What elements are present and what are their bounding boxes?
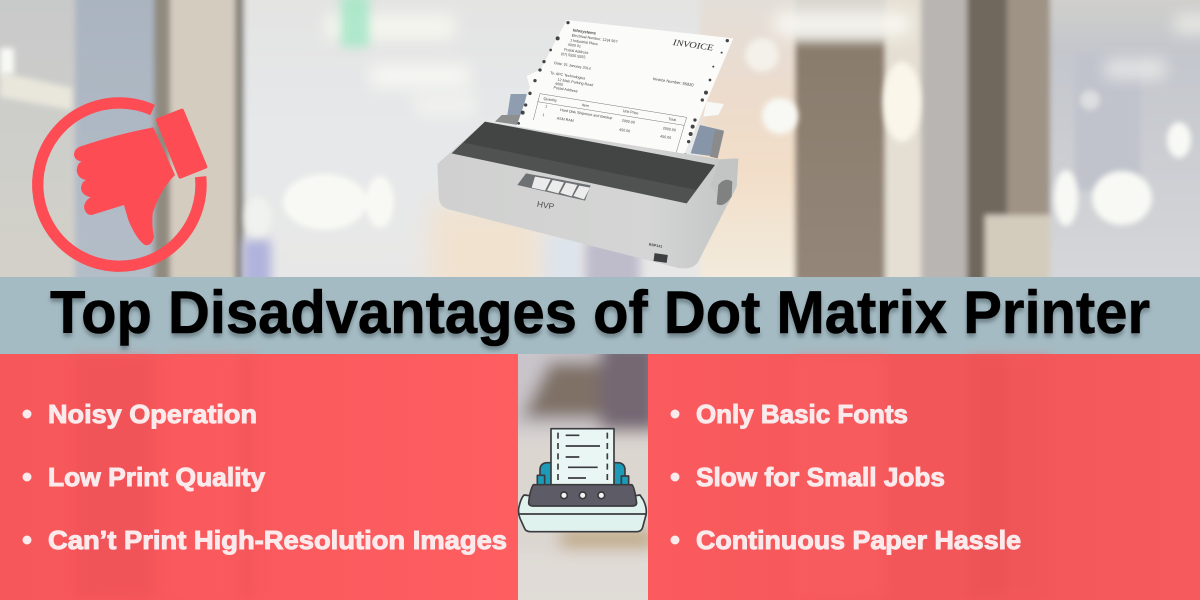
invoice paper: Item bbox=[581, 103, 589, 108]
invoice paper: 450.00 bbox=[619, 128, 630, 133]
icon: small printer bbox=[518, 429, 646, 532]
printer body bbox=[437, 122, 738, 268]
invoice paper: 1 Industrial Place bbox=[570, 38, 598, 46]
dot matrix printer illustration bbox=[437, 20, 738, 268]
bands behind icon bbox=[518, 354, 648, 600]
panel texture bbox=[795, 356, 1050, 598]
invoice paper: ASM RAM bbox=[556, 116, 574, 123]
heading: INVOICE: INVOICE bbox=[671, 37, 715, 53]
invoice paper: To: APC Technologies bbox=[550, 71, 586, 81]
invoice paper: 1 bbox=[542, 113, 545, 117]
invoice paper: (07) 5555 5555 bbox=[561, 52, 586, 59]
bullet: continuous paper hassle: Continuous Paper Hassle bbox=[696, 525, 1021, 555]
bullet: high-resolution images: Can’t Print High-Resolution Images bbox=[48, 525, 507, 555]
left paper guide bbox=[495, 94, 527, 125]
invoice paper: Hard Disk Shipment and Backup bbox=[560, 108, 613, 120]
invoice paper: Unit Price bbox=[622, 109, 639, 115]
bullet: slow for small jobs: Slow for Small Jobs bbox=[696, 462, 945, 492]
invoice paper: 4000 01 bbox=[568, 43, 581, 48]
icon: thumbs down in red ring bbox=[38, 103, 205, 266]
right paper guide bbox=[691, 125, 724, 158]
invoice paper: Electrical Number: 1234 567 bbox=[572, 33, 618, 44]
invoice paper: 4000 bbox=[555, 82, 563, 87]
invoice paper: 450.00 bbox=[660, 134, 671, 140]
invoice paper: Total bbox=[668, 117, 677, 122]
invoice paper: Quantity bbox=[543, 97, 557, 103]
invoice paper: Date: 01 January 2014 bbox=[554, 61, 591, 71]
panel texture bbox=[75, 356, 254, 598]
invoice paper: Invoice Number: 85920 bbox=[652, 76, 695, 88]
invoice paper: Postal Address bbox=[553, 86, 578, 93]
invoice paper bbox=[517, 20, 733, 157]
invoice paper: Postal Address bbox=[564, 48, 589, 55]
invoice paper: 1 bbox=[545, 104, 547, 109]
invoice paper: 2000.00 bbox=[662, 126, 676, 132]
bullet: only basic fonts: Only Basic Fonts bbox=[696, 399, 908, 429]
bullet: noisy operation: Noisy Operation bbox=[48, 399, 257, 429]
title shadow: Top Disadvantages of Dot Matrix Printer bbox=[50, 283, 1150, 350]
panel: left disadvantages bbox=[0, 354, 518, 600]
invoice paper: 12 Main Parking Road bbox=[557, 78, 594, 87]
bullet: low print quality: Low Print Quality bbox=[48, 462, 266, 492]
title band bbox=[0, 277, 1200, 354]
invoice paper: 2000.00 bbox=[621, 119, 635, 125]
model label: RSP141 bbox=[648, 243, 663, 249]
brand label: HVP bbox=[536, 199, 555, 211]
title: Top Disadvantages of Dot Matrix Printer bbox=[50, 279, 1150, 346]
invoice paper: Infosystems bbox=[573, 27, 597, 36]
panel: right disadvantages bbox=[648, 354, 1200, 600]
